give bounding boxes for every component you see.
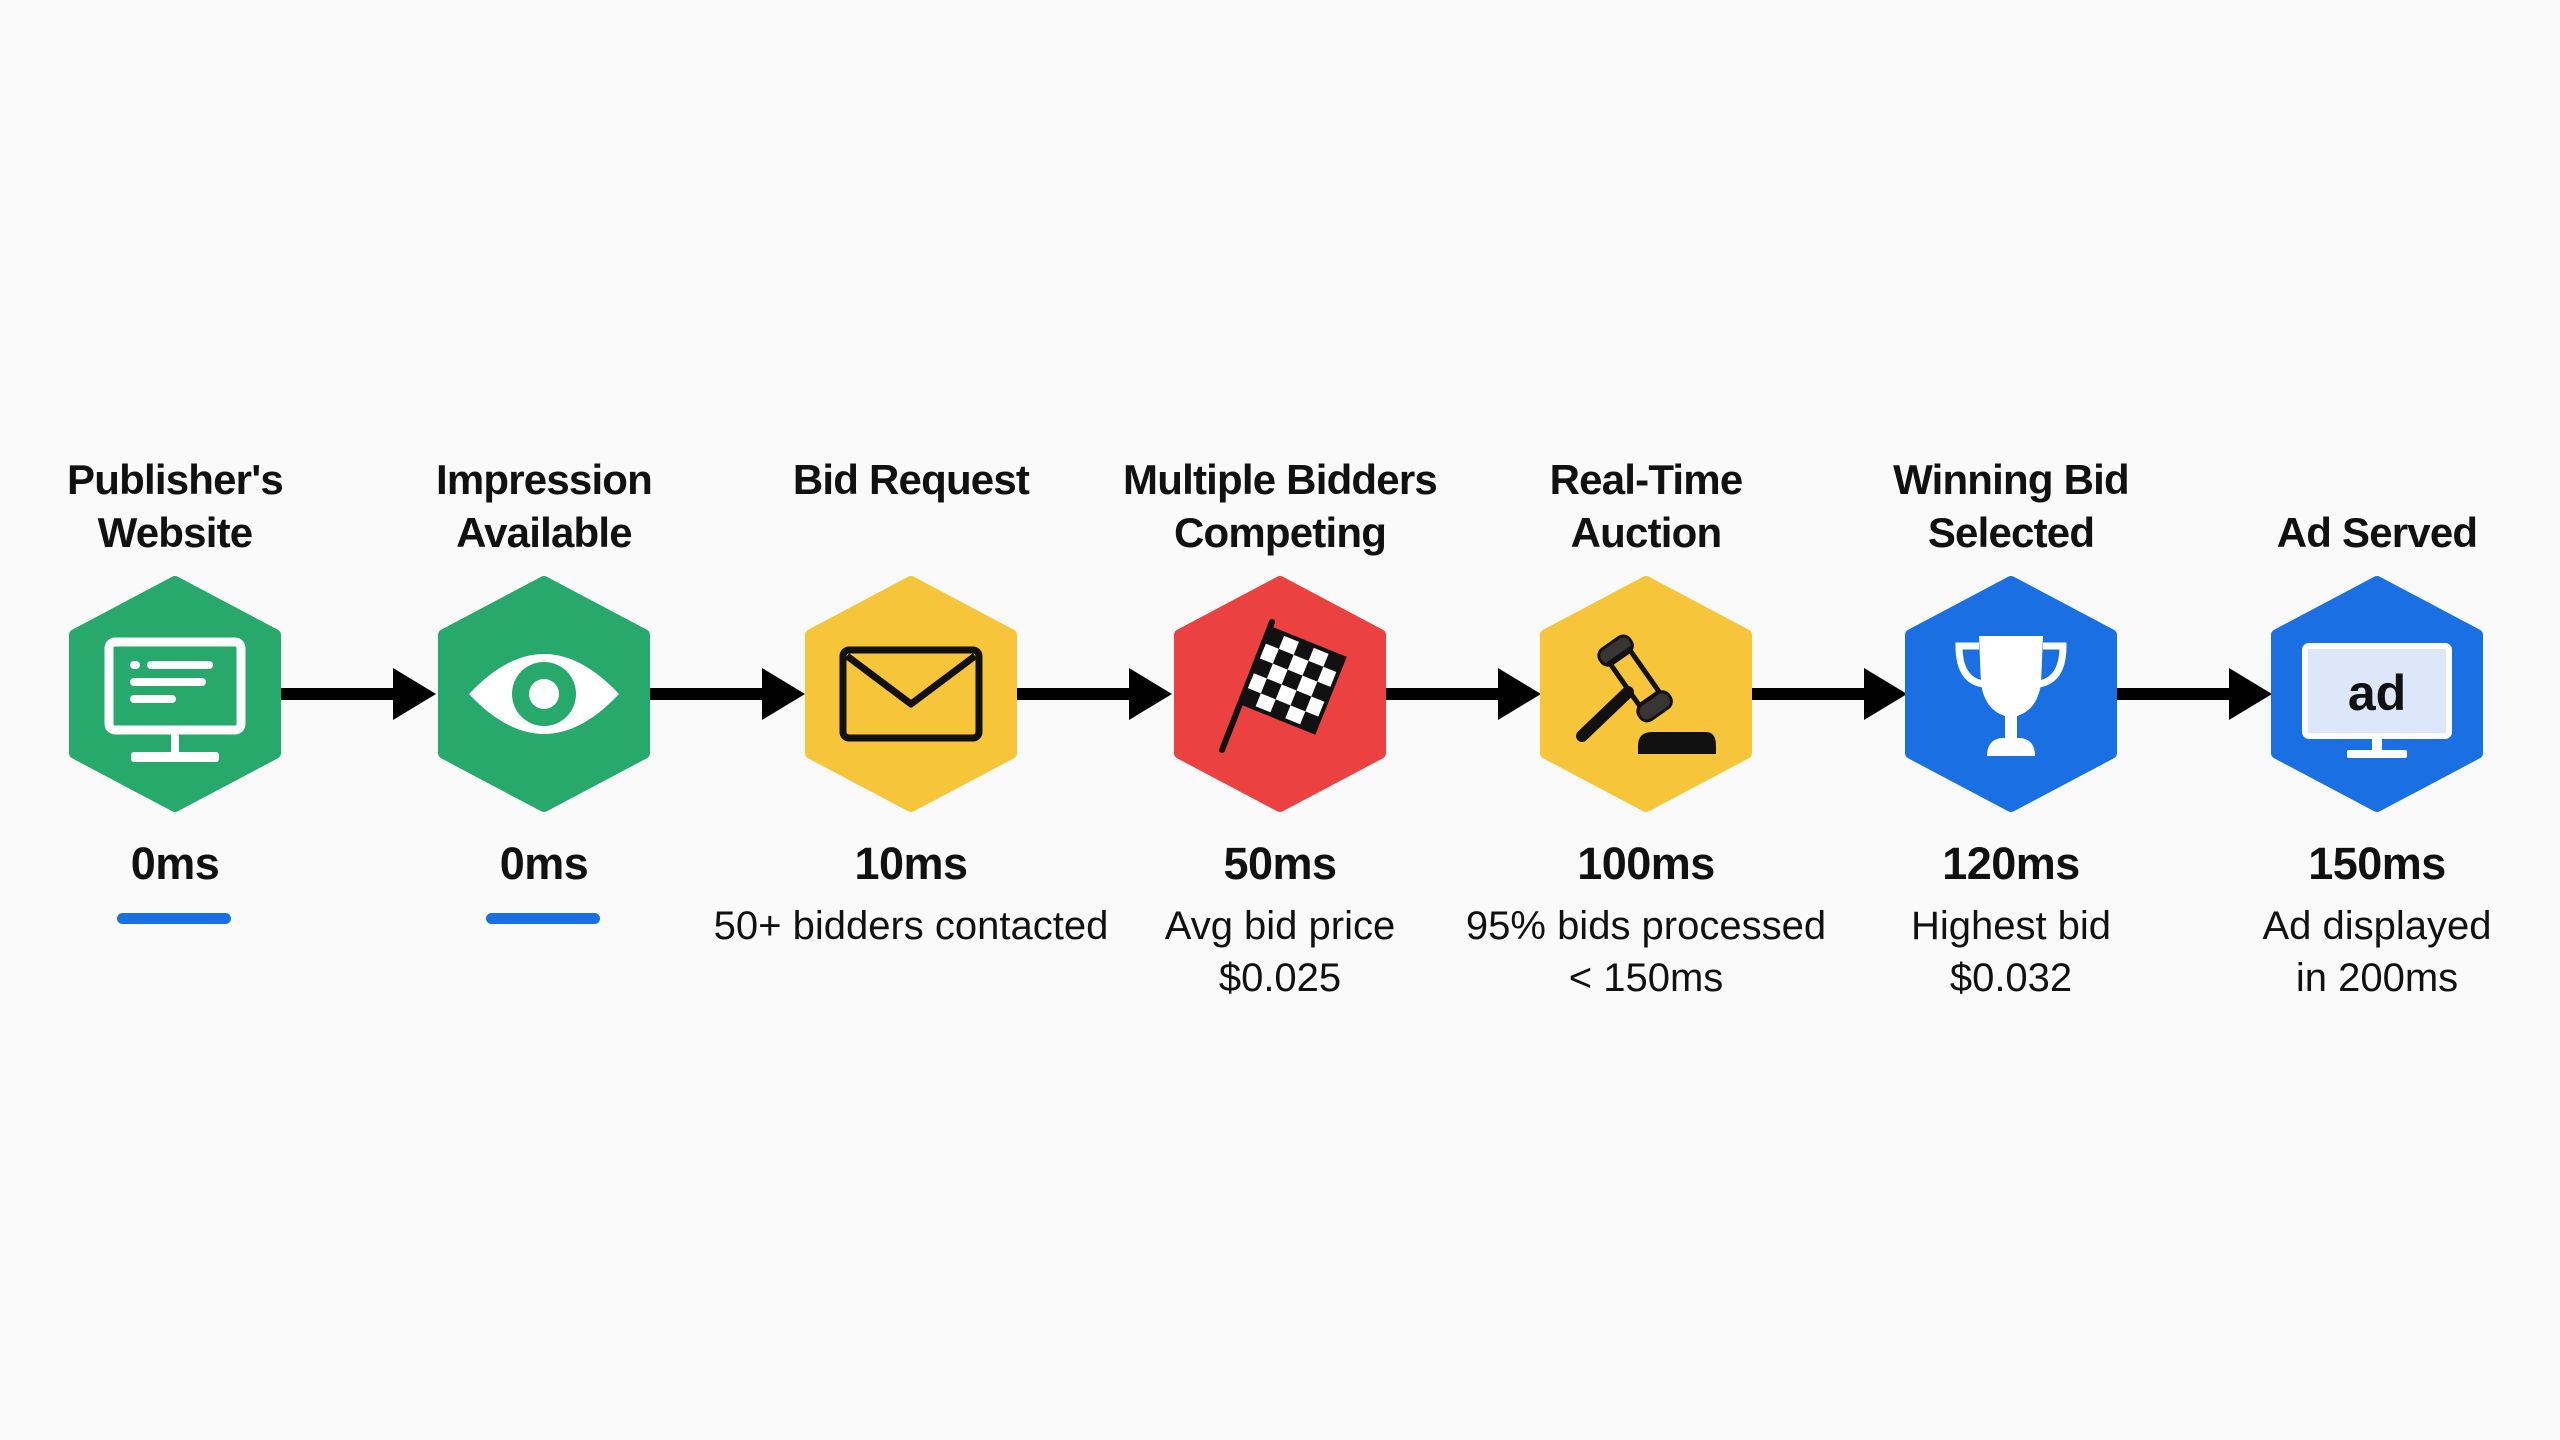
arrow: 2 to 3	[650, 668, 805, 720]
step 7: Ad Served	[2262, 509, 2492, 1000]
description: < 150ms	[1569, 956, 1723, 1000]
timing: 100ms	[1577, 838, 1715, 889]
title: Website	[98, 509, 252, 556]
timing: 0ms	[500, 838, 588, 889]
timing: 0ms	[131, 838, 219, 889]
title: Competing	[1174, 509, 1386, 556]
arrow: 6 to 7	[2117, 668, 2272, 720]
step 3: Bid Request	[714, 456, 1108, 948]
title: Bid Request	[793, 456, 1030, 503]
arrow: 1 to 2	[281, 668, 436, 720]
timing: 50ms	[1223, 838, 1337, 889]
icon: trophy hexagon	[1911, 582, 2111, 806]
icon: eye hexagon	[444, 582, 644, 806]
timing: 120ms	[1942, 838, 2080, 889]
step 5: Real-Time Auction	[1466, 456, 1826, 1000]
timing: 150ms	[2308, 838, 2446, 889]
title: Auction	[1571, 509, 1721, 556]
underline bar	[486, 913, 600, 924]
title: Publisher's	[67, 456, 283, 503]
arrow: 4 to 5	[1386, 668, 1541, 720]
description: Ad displayed	[2262, 904, 2492, 948]
step 6: Winning Bid Selected	[1893, 456, 2129, 1000]
title: Multiple Bidders	[1123, 456, 1437, 503]
step 4: Multiple Bidders Competing	[1123, 456, 1437, 1000]
step 1: Publisher's Website	[67, 456, 283, 924]
title: Real-Time	[1550, 456, 1742, 503]
icon: ad monitor hexagon	[2277, 582, 2477, 806]
title: Available	[456, 509, 632, 556]
title: Impression	[436, 456, 652, 503]
arrow: 5 to 6	[1752, 668, 1907, 720]
icon: checkered flag hexagon	[1180, 582, 1380, 806]
description: Avg bid price	[1165, 904, 1395, 948]
description: Highest bid	[1911, 904, 2111, 948]
title: Ad Served	[2277, 509, 2477, 556]
description: $0.032	[1950, 956, 2072, 1000]
icon: monitor hexagon	[75, 582, 275, 806]
step 2: Impression Available	[436, 456, 652, 924]
underline bar	[117, 913, 231, 924]
icon: envelope hexagon	[811, 582, 1011, 806]
description: $0.025	[1219, 956, 1341, 1000]
timing: 10ms	[854, 838, 968, 889]
description: 95% bids processed	[1466, 904, 1826, 948]
title: Winning Bid	[1893, 456, 2129, 503]
arrow: 3 to 4	[1017, 668, 1172, 720]
icon: ad monitor hexagon: ad	[2348, 665, 2406, 721]
description: 50+ bidders contacted	[714, 904, 1108, 948]
description: in 200ms	[2296, 956, 2458, 1000]
title: Selected	[1928, 509, 2094, 556]
icon: gavel hexagon	[1546, 582, 1746, 806]
